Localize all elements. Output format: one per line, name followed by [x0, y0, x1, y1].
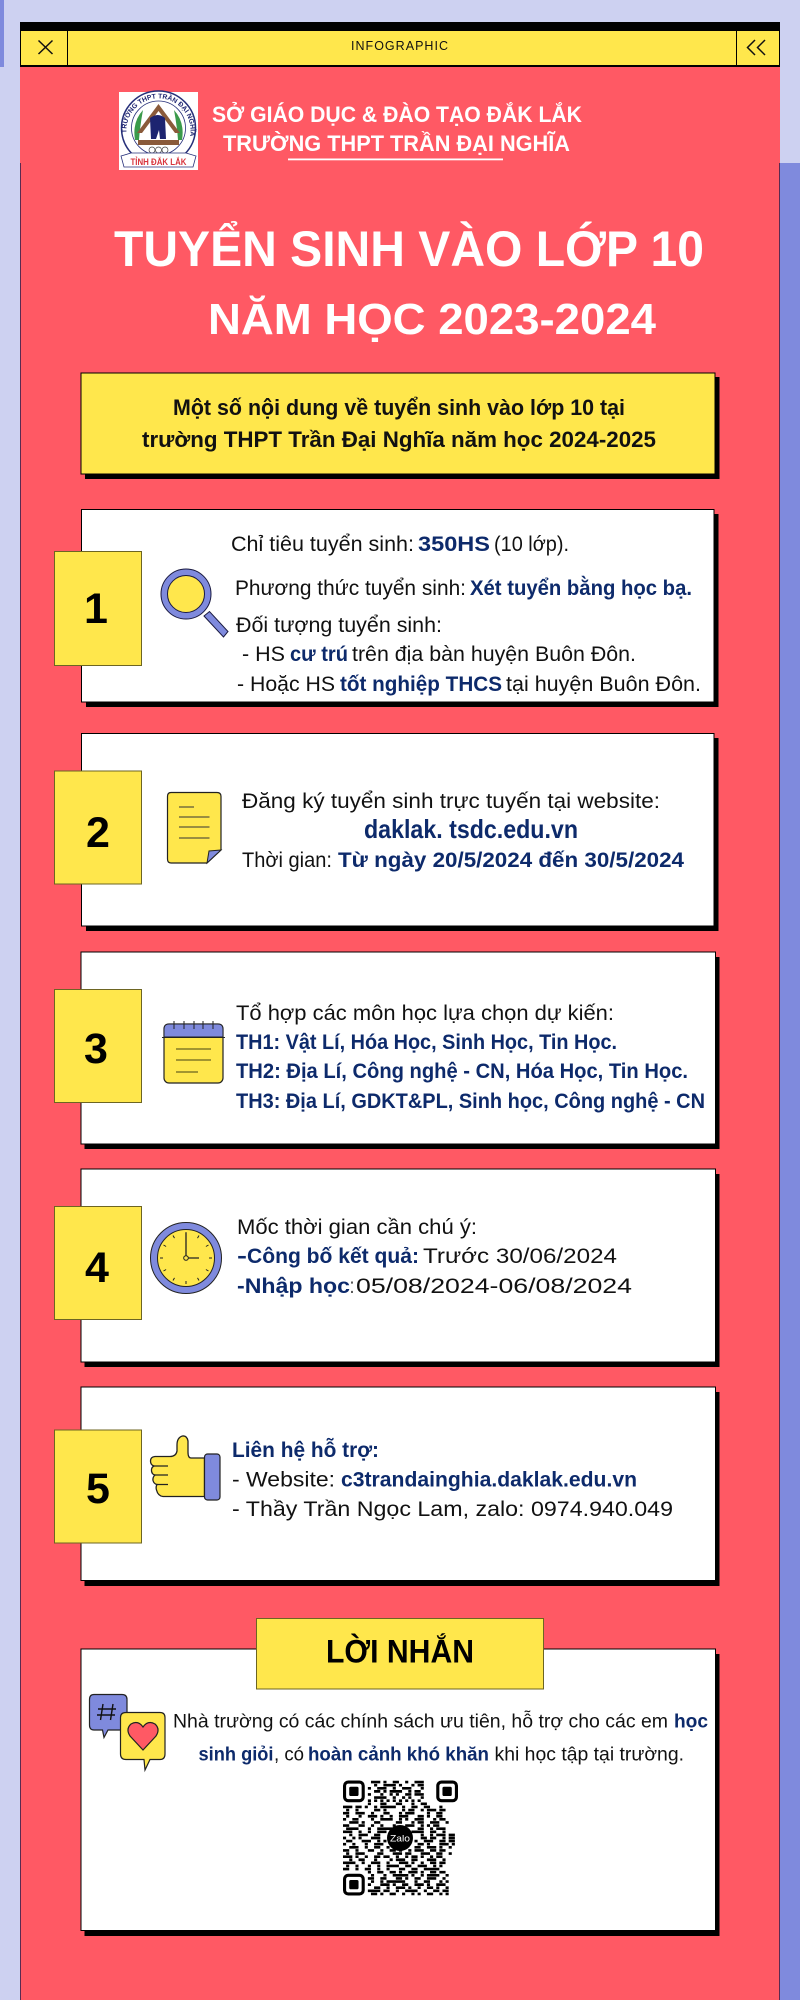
step 4 text: Mốc thời gian cần chú ý: — [237, 1216, 477, 1239]
number tile 5: 5 — [86, 1465, 110, 1513]
number tile 3: 3 — [84, 1025, 108, 1073]
header: school name — [212, 102, 582, 160]
number tile 4 — [54, 1206, 142, 1320]
intro text: trường THPT Trần Đại Nghĩa năm học 2024-2025 — [142, 427, 656, 452]
window title bar — [20, 22, 780, 67]
message text: học — [674, 1712, 708, 1732]
number tile 1 — [54, 552, 142, 666]
panel: intro box — [81, 373, 720, 479]
step 2 text: Từ ngày 20/5/2024 đến 30/5/2024 — [338, 849, 684, 872]
header: school name: TRƯỜNG THPT TRẦN ĐẠI NGHĨA — [223, 131, 570, 156]
school logo: TRƯỜNG THPT TRẦN ĐẠI NGHĨA — [122, 94, 197, 136]
icon: chat bubbles — [90, 1694, 165, 1770]
step 1 text: 350HS — [418, 533, 490, 556]
step 1 text: - Hoặc HS — [237, 673, 335, 696]
step 2 text: Đăng ký tuyển sinh trực tuyến tại website: — [242, 790, 660, 813]
step 4 text: - — [237, 1245, 247, 1268]
number tile 2: 2 — [86, 809, 110, 857]
step 4 text: Công bố kết quả: — [247, 1245, 419, 1268]
number tile 1: 1 — [84, 585, 108, 633]
title — [114, 221, 704, 344]
school logo: TỈNH ĐẮK LẮK — [130, 156, 187, 167]
icon: notepad — [162, 1021, 225, 1083]
message text: khi học tập tại trường. — [494, 1744, 684, 1766]
panel: step 2 — [54, 734, 718, 931]
step 5 text: - Website: — [232, 1468, 335, 1492]
step 4 text: 05/08/2024-06/08/2024 — [356, 1275, 632, 1298]
message text: , có — [274, 1744, 304, 1766]
step 4 text: : — [350, 1275, 354, 1298]
panel: step 4 — [54, 1169, 720, 1367]
panel: step 5 — [54, 1387, 720, 1586]
step 4 text: -Nhập học — [237, 1275, 350, 1298]
icon: double chevron — [748, 40, 765, 55]
heading: message: LỜI NHẮN — [326, 1634, 474, 1670]
step 3 text: TH3: Địa Lí, GDKT&PL, Sinh học, Công nghệ - CN — [236, 1090, 705, 1113]
message text: Nhà trường có các chính sách ưu tiên, hỗ trợ cho các em — [173, 1710, 668, 1732]
QR code — [343, 1782, 456, 1894]
step 1 text: (10 lớp). — [494, 533, 569, 556]
intro text — [142, 395, 656, 452]
heading: message — [256, 1618, 544, 1689]
step 2 text: daklak. tsdc.edu.vn — [364, 814, 578, 844]
step 3 text: TH2: Địa Lí, Công nghệ - CN, Hóa Học, Tin Học. — [236, 1060, 688, 1083]
step 1 text: tại huyện Buôn Đôn. — [506, 673, 701, 696]
step 1 text: Xét tuyển bằng học bạ. — [470, 576, 692, 600]
step 3 text: Tổ hợp các môn học lựa chọn dự kiến: — [236, 1002, 614, 1025]
panel: step 3 — [54, 952, 720, 1149]
step 1 text: Phương thức tuyển sinh: — [235, 577, 466, 600]
panel: message — [81, 1618, 720, 1936]
school logo — [119, 90, 198, 170]
icon: thumbs up — [150, 1436, 220, 1500]
number tile 5 — [54, 1430, 142, 1543]
number tile 4: 4 — [85, 1244, 109, 1292]
panel: step 1 — [54, 510, 718, 707]
step 4 text: Trước 30/06/2024 — [423, 1245, 617, 1268]
message text: hoàn cảnh khó khăn — [308, 1744, 489, 1766]
icon: magnifier — [161, 569, 228, 637]
message text: sinh giỏi — [198, 1744, 274, 1766]
step 3 text — [236, 1002, 705, 1113]
message text — [173, 1710, 708, 1766]
step 5 text: - Thầy Trần Ngọc Lam, zalo: 0974.940.049 — [232, 1498, 673, 1521]
Zalo badge: Zalo — [390, 1834, 410, 1844]
step 1 text: Chỉ tiêu tuyển sinh: — [231, 533, 414, 556]
step 5 text — [232, 1438, 673, 1521]
step 5 text: c3trandainghia.daklak.edu.vn — [341, 1468, 637, 1492]
step 1 text — [231, 533, 701, 696]
step 2 text — [242, 790, 684, 872]
header: school name: SỞ GIÁO DỤC & ĐÀO TẠO ĐẮK LẮK — [212, 102, 582, 127]
number tile 2 — [54, 771, 142, 884]
step 1 text: cư trú — [290, 643, 348, 666]
step 5 text: Liên hệ hỗ trợ: — [232, 1438, 379, 1462]
step 1 text: trên địa bàn huyện Buôn Đôn. — [352, 643, 636, 666]
step 4 text — [237, 1216, 632, 1298]
number tile 3 — [54, 990, 142, 1102]
icon: close — [38, 40, 52, 54]
title: NĂM HỌC 2023-2024 — [208, 294, 657, 344]
title: TUYỂN SINH VÀO LỚP 10 — [114, 221, 704, 277]
bar label: INFOGRAPHIC — [351, 39, 448, 53]
step 1 text: Đối tượng tuyển sinh: — [236, 614, 442, 637]
icon: clock — [150, 1222, 222, 1294]
step 1 text: tốt nghiệp THCS — [340, 673, 502, 696]
step 1 text: - HS — [242, 643, 285, 666]
intro text: Một số nội dung về tuyển sinh vào lớp 10 tại — [173, 395, 625, 420]
step 2 text: Thời gian: — [242, 849, 332, 872]
icon: document — [168, 792, 221, 863]
step 3 text: TH1: Vật Lí, Hóa Học, Sinh Học, Tin Học. — [236, 1031, 617, 1054]
